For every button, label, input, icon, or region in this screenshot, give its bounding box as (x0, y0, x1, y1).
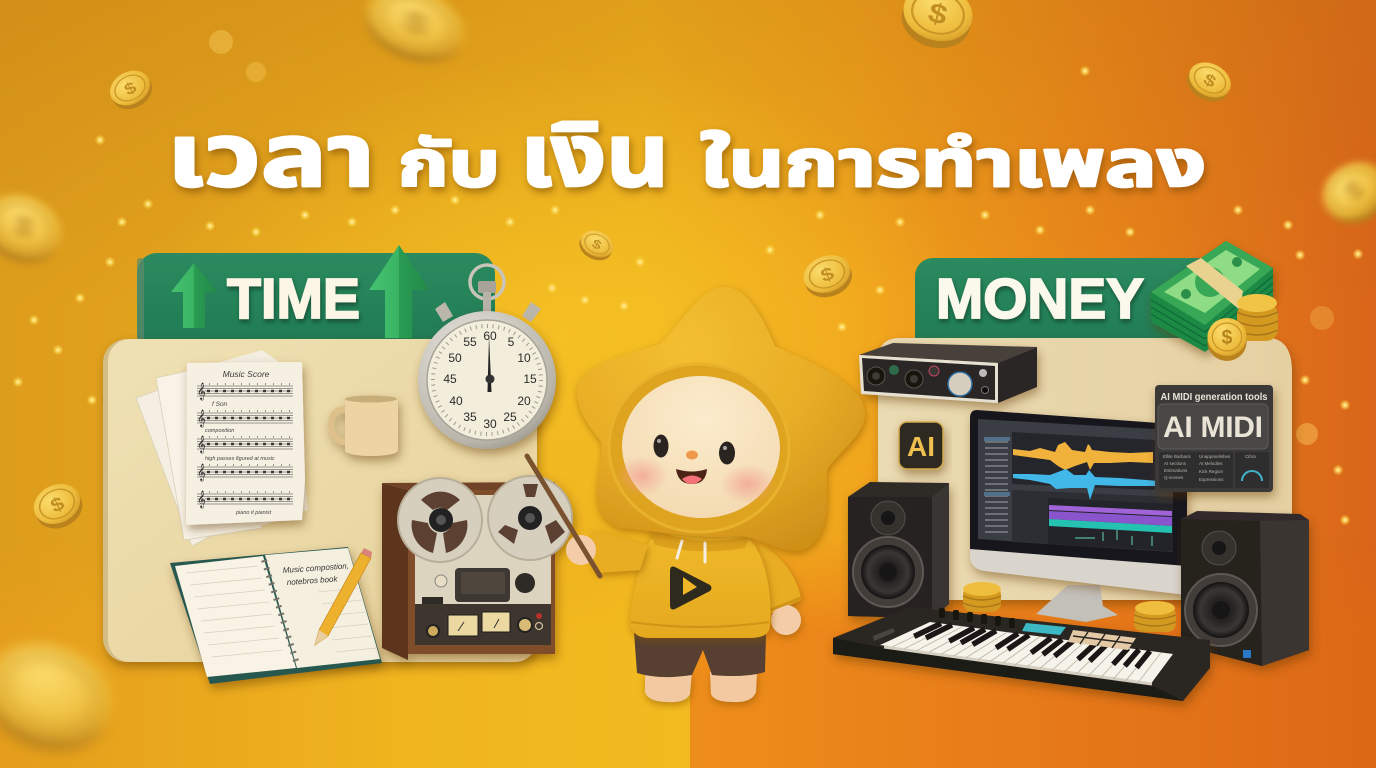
stopwatch numbers: 35 (463, 410, 477, 424)
money label: MONEY (936, 267, 1144, 331)
title: กับ (398, 128, 500, 200)
main score sheet (186, 362, 305, 525)
coin top right (1181, 55, 1237, 108)
AI MIDI panel: Cibra (1245, 454, 1256, 459)
notebook handwriting: notebros book (287, 574, 339, 587)
coin top left (104, 64, 158, 116)
coin top left: $ (121, 78, 139, 99)
notebook lines (186, 566, 376, 657)
mascot star hood (577, 287, 865, 551)
music score sheets: piano it pianist (235, 510, 272, 516)
title: เวลา (167, 106, 375, 205)
audio interface (859, 343, 1037, 403)
knobs (939, 608, 1015, 628)
coin far right: $ (1340, 174, 1369, 207)
mascot left hand (566, 535, 596, 565)
coin center small (575, 226, 618, 265)
AI MIDI panel: Ellite Barbaris (1163, 454, 1192, 459)
keyboard display and pads (1022, 623, 1066, 635)
coin center right: $ (818, 263, 837, 287)
mascot: star hooded character (527, 287, 865, 702)
reel to reel tape machine (382, 476, 572, 660)
stopwatch numbers: 10 (517, 351, 531, 365)
staves and notes (197, 384, 293, 504)
mascot left arm (590, 530, 648, 573)
title: ในการทำเพลง (700, 126, 1206, 200)
timeline tracks (1049, 505, 1172, 516)
AI MIDI panel: AI Melodies (1199, 461, 1223, 466)
treble clefs: 𝄞 (197, 436, 206, 453)
stopwatch numbers: 20 (517, 394, 531, 408)
right reel (488, 476, 572, 560)
monitor body (970, 410, 1187, 595)
cash stack (1151, 241, 1273, 352)
white keys (880, 622, 1173, 685)
stopwatch numbers: 45 (443, 372, 457, 386)
coin center small: $ (590, 237, 604, 253)
spiral binding (264, 560, 297, 664)
left studio speaker (848, 482, 949, 618)
conductor baton (527, 456, 600, 576)
monitor with DAW (970, 410, 1187, 622)
AI MIDI panel: Q-scenes (1164, 475, 1184, 480)
mascot legs (645, 672, 757, 702)
AI icon: AI (907, 431, 935, 462)
coin mid left: $ (47, 493, 68, 517)
stopwatch numbers: 5 (508, 335, 515, 349)
DAW screen (978, 419, 1173, 552)
yellow waveform (1013, 442, 1153, 470)
mascot face (616, 371, 785, 523)
notebook handwriting (283, 561, 349, 587)
time cream board (103, 339, 537, 662)
AI MIDI panel (1155, 385, 1273, 492)
gold coin stack right (1134, 601, 1176, 632)
stopwatch numbers: 55 (463, 335, 477, 349)
tape head block (455, 568, 510, 602)
time label: TIME (227, 267, 360, 331)
AI MIDI panel: Estimations (1164, 468, 1188, 473)
left reel (398, 478, 482, 562)
treble clefs: 𝄞 (197, 491, 206, 508)
treble clefs (197, 383, 206, 508)
gold coin stack on cash: $ (1222, 327, 1232, 349)
time green tab (137, 253, 495, 353)
stopwatch numbers: 15 (523, 372, 537, 386)
VU meters (448, 615, 478, 636)
gold coin stack on cash (1207, 294, 1278, 361)
treble clefs: 𝄞 (197, 464, 206, 481)
AI MIDI panel: Expressions (1199, 477, 1224, 482)
treble clefs: 𝄞 (197, 410, 206, 427)
treble clefs: 𝄞 (197, 383, 206, 400)
blue waveform (1013, 469, 1172, 500)
AI MIDI panel: Unapparelishes (1199, 454, 1231, 459)
arrow up large (369, 245, 429, 338)
music score sheets: Music Score (223, 369, 270, 379)
coin mid left (27, 477, 89, 536)
coin top right: $ (1200, 70, 1220, 91)
AI MIDI panel: AI MIDI generation tools (1160, 392, 1268, 403)
coin bottom left blurred (0, 628, 124, 767)
mascot right arm and hand (752, 545, 801, 635)
coin top center blurred: $ (398, 3, 433, 43)
music score sheets (136, 350, 308, 546)
music score sheets: high passes figured at music (205, 456, 275, 462)
coin far left: $ (8, 208, 39, 245)
panel: money (833, 241, 1309, 701)
stopwatch numbers: 60 (483, 329, 497, 343)
stopwatch numbers (443, 329, 537, 431)
monitor stand (1036, 585, 1118, 622)
stopwatch numbers: 25 (503, 410, 517, 424)
coin top middle (895, 0, 979, 56)
AI MIDI panel: Kick Region (1199, 469, 1224, 474)
mascot hoodie (630, 527, 771, 638)
coin far right (1313, 152, 1376, 234)
notebook (170, 547, 382, 684)
AI icon (899, 422, 943, 469)
music score sheets: composition (205, 428, 234, 434)
AI MIDI panel: AI MIDI (1163, 411, 1263, 444)
AI MIDI panel: AI sections (1164, 461, 1187, 466)
play logo (670, 566, 712, 610)
hood opening rim (603, 358, 795, 538)
mascot shorts (634, 632, 766, 677)
stopwatch numbers: 30 (483, 417, 497, 431)
coin top center blurred (358, 0, 472, 75)
money cream board (878, 338, 1292, 600)
panel: time (103, 245, 572, 684)
arrow up small (171, 263, 217, 328)
stopwatch numbers: 50 (448, 351, 462, 365)
sparkles: golden bokeh dots (12, 30, 1364, 526)
title: เงิน (520, 106, 669, 205)
coin far left (0, 184, 70, 275)
gold coin stack left (963, 582, 1001, 612)
black keys (914, 624, 1150, 668)
coffee mug (331, 396, 398, 456)
money green tab (915, 258, 1235, 358)
track list (985, 442, 1008, 532)
notebook handwriting: Music compostion, (283, 561, 349, 575)
stopwatch (418, 265, 556, 449)
title (167, 106, 1206, 205)
coin center right (798, 249, 857, 304)
pencil (315, 548, 372, 645)
stopwatch numbers: 40 (449, 394, 463, 408)
right studio speaker (1181, 511, 1309, 666)
midi keyboard (833, 607, 1210, 701)
music score sheets: f Son (212, 401, 228, 408)
